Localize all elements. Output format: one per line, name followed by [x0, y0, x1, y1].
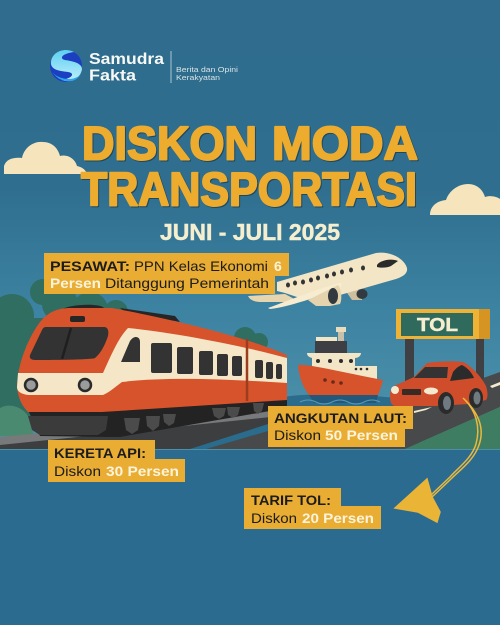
label: angkutan laut: Diskon — [274, 427, 321, 443]
logo: Samudra Fakta: Berita dan Opini — [176, 65, 238, 74]
label: kereta api: KERETA API: — [54, 445, 146, 461]
title: TRANSPORTASI — [81, 162, 417, 216]
title: DISKON — [83, 118, 258, 170]
cloud: right — [430, 184, 500, 215]
title: MODA — [273, 118, 419, 170]
label: kereta api: Diskon — [54, 463, 101, 479]
label: pesawat — [44, 253, 289, 294]
scene: trees behind train — [0, 279, 268, 418]
scene: rail and ground — [0, 414, 290, 449]
label: angkutan laut: ANGKUTAN LAUT: — [274, 410, 407, 426]
logo: Samudra Fakta: Fakta — [89, 68, 136, 84]
scene: bush lower left — [0, 406, 34, 436]
label: kereta api: 30 Persen — [106, 463, 179, 479]
scene: road — [206, 372, 500, 449]
toll sign: TOL — [417, 315, 458, 335]
ship — [298, 327, 383, 404]
label: pesawat: Ditanggung Pemerintah — [105, 275, 269, 291]
title — [81, 116, 419, 216]
scene: road markings — [414, 382, 500, 413]
label: pesawat: PESAWAT: — [50, 258, 130, 274]
title: MODA — [272, 116, 418, 170]
subtitle: date: JUNI - JULI 2025 — [160, 219, 340, 245]
title: TRANSPORTASI — [82, 164, 418, 216]
label: kereta api — [48, 440, 185, 482]
label: pesawat: 6 — [274, 258, 282, 274]
arrow — [395, 398, 481, 522]
scene: water — [150, 394, 420, 449]
scene: grass — [405, 407, 500, 449]
toll sign — [396, 309, 490, 384]
label: tarif tol — [244, 488, 381, 529]
title: DISKON — [82, 116, 257, 170]
label: tarif tol: Diskon — [251, 510, 297, 526]
label: angkutan laut: 50 Persen — [325, 427, 398, 443]
train — [17, 305, 287, 437]
logo: Samudra Fakta: Samudra — [89, 51, 164, 68]
logo: Samudra Fakta — [50, 50, 238, 84]
logo: Samudra Fakta: Kerakyatan — [176, 73, 220, 82]
label: pesawat: Persen — [50, 275, 101, 291]
plane — [248, 253, 407, 309]
label: tarif tol: 20 Persen — [302, 510, 374, 526]
label: angkutan laut — [268, 406, 413, 447]
label: pesawat: PPN Kelas Ekonomi — [134, 258, 268, 274]
cloud: left — [4, 142, 87, 174]
car — [390, 361, 488, 414]
label: tarif tol: TARIF TOL: — [251, 492, 331, 508]
